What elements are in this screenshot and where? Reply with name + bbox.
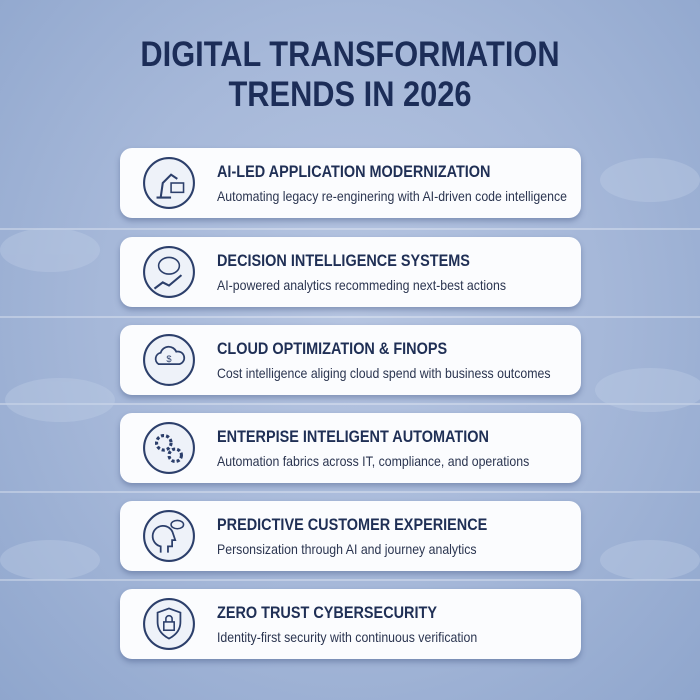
- title: [140, 35, 560, 114]
- card: predictive CX: PREDICTIVE CUSTOMER EXPERIENCE: [217, 515, 487, 534]
- card: decision intelligence: DECISION INTELLIGENCE SYSTEMS: [217, 251, 470, 270]
- icon: gears: [143, 422, 195, 474]
- icon: cloud dollar: $: [166, 354, 172, 364]
- title: DIGITAL TRANSFORMATION: [140, 35, 560, 74]
- card: AI-led application modernization: [120, 148, 581, 218]
- card: decision intelligence: [120, 237, 581, 307]
- card: predictive CX: [120, 501, 581, 571]
- card: intelligent automation: [120, 413, 581, 483]
- icon: shield lock: [143, 598, 195, 650]
- card: cloud optimization: [120, 325, 581, 395]
- card: AI-led application modernization: AI-LED APPLICATION MODERNIZATION: [217, 162, 490, 181]
- card: AI-led application modernization: Automating legacy re-enginering with AI-driven code intelligence: [217, 188, 567, 204]
- card: zero trust: [120, 589, 581, 659]
- card: cloud optimization: Cost intelligence aliging cloud spend with business outcomes: [217, 365, 551, 381]
- card: cloud optimization: CLOUD OPTIMIZATION & FINOPS: [217, 339, 447, 358]
- card: zero trust: ZERO TRUST CYBERSECURITY: [217, 603, 437, 622]
- icon: brain chart: [143, 246, 195, 298]
- card: decision intelligence: AI-powered analytics recommeding next-best actions: [217, 277, 506, 293]
- icon: cloud dollar: [143, 334, 195, 386]
- card: intelligent automation: ENTERPISE INTELIGENT AUTOMATION: [217, 427, 489, 446]
- card: zero trust: Identity-first security with continuous verification: [217, 629, 477, 645]
- icon: robot arm code: [143, 157, 195, 209]
- icon: head chat: [143, 510, 195, 562]
- title: TRENDS IN 2026: [228, 75, 472, 114]
- card: intelligent automation: Automation fabrics across IT, compliance, and operations: [217, 453, 529, 469]
- card: predictive CX: Personsization through AI and journey analytics: [217, 541, 477, 557]
